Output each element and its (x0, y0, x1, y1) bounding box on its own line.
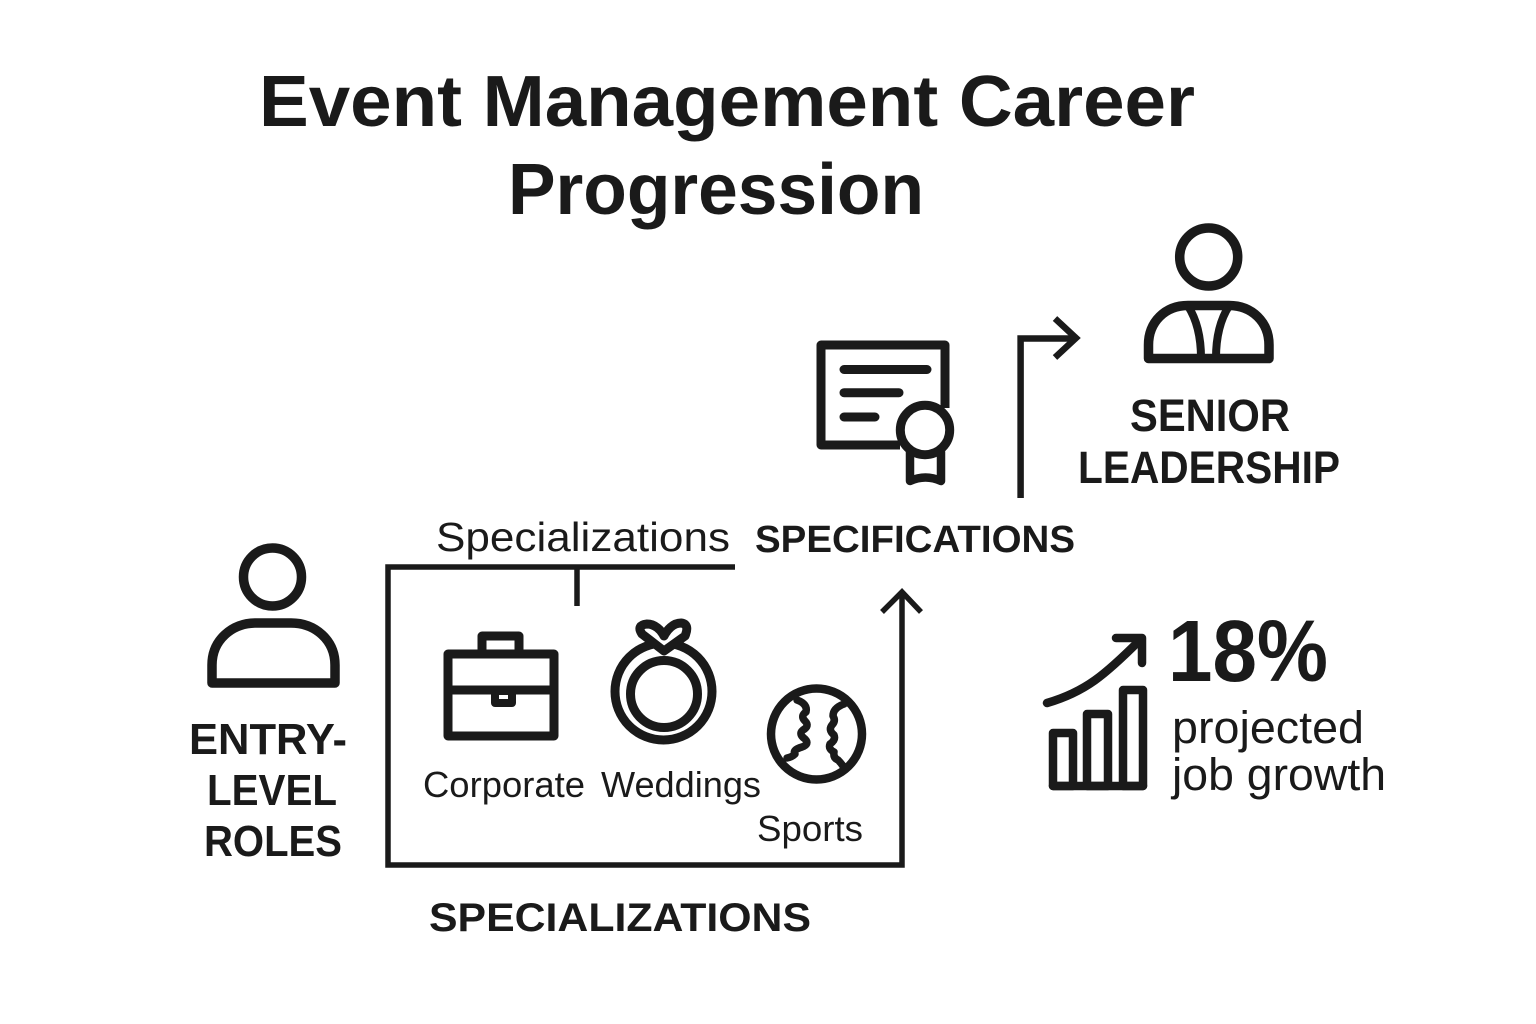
heading: entry-level roles (189, 715, 347, 866)
text: projected job growth: projected (1172, 702, 1364, 753)
chart icon: growth bars with arrow (1047, 638, 1143, 786)
label: corporate: Corporate (423, 764, 585, 805)
icon: senior leader person (1148, 228, 1269, 358)
text: projected job growth (1170, 702, 1386, 800)
icon: certificate (821, 345, 950, 481)
text: projected job growth: job growth (1170, 749, 1386, 800)
heading: entry-level roles: LEVEL (207, 766, 337, 815)
arrow: up to senior leadership (1021, 318, 1076, 498)
title: Event Management Career (259, 62, 1195, 142)
heading: senior leadership: LEADERSHIP (1078, 442, 1340, 493)
heading: senior leadership: SENIOR (1130, 390, 1290, 441)
icon: briefcase (448, 636, 554, 736)
icon: entry-level person (212, 548, 335, 683)
icon: baseball (771, 688, 862, 780)
label: specializations bottom: SPECIALIZATIONS (429, 896, 811, 940)
stat: 18%: 18% (1168, 603, 1328, 700)
label: sports: Sports (757, 808, 863, 849)
heading: senior leadership (1078, 390, 1340, 493)
label: weddings: Weddings (601, 764, 761, 805)
heading: entry-level roles: ENTRY- (189, 715, 347, 764)
panel: specialization bracket with arrow (388, 567, 921, 865)
title (259, 62, 1195, 230)
title: Progression (508, 150, 924, 230)
label: specializations top: Specializations (436, 514, 730, 560)
icon: wedding ring (615, 623, 712, 740)
label: specifications: SPECIFICATIONS (755, 519, 1075, 561)
heading: entry-level roles: ROLES (204, 817, 342, 866)
